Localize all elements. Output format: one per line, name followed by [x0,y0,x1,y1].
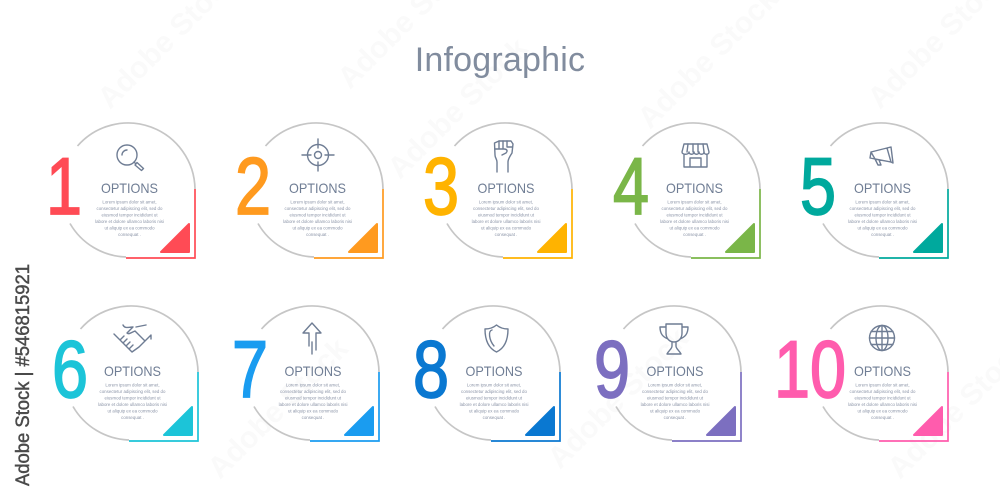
heading: OPTIONS [666,181,723,196]
description [279,382,347,420]
heading: OPTIONS [104,364,161,379]
card 4 [613,123,760,258]
description: eiusmod tempor incididunt ut [289,212,346,218]
description: consectetur adipiscing elit, sed do [642,389,709,394]
card 8 [413,306,560,441]
heading: OPTIONS [646,364,704,379]
description: consequat . [871,232,894,237]
description: consequat . [664,415,686,420]
description: ut aliquip ex ea commodo [857,226,908,230]
description: eiusmod tempor incididunt ut [854,212,911,218]
description: eiusmod tempor incididunt ut [647,396,704,400]
card 2 [235,123,383,258]
description: ut aliquip ex ea commodo [469,408,520,414]
heading: OPTIONS [466,364,522,379]
heading: OPTIONS [854,181,911,196]
heading: OPTIONS [289,181,346,196]
description: consectetur adipiscing elit, sed do [850,389,916,394]
icon: magnifier [117,145,144,170]
description: labore et dolore ullamco laboris nisi [279,402,347,407]
description: Lorem ipsum dolor sit amet, [105,382,160,388]
description: Lorem ipsum dolor sit amet, [102,200,157,204]
description: consequat . [121,415,144,420]
description: ut aliquip ex ea commodo [107,408,158,414]
description: Lorem ipsum dolor sit amet, [479,200,533,204]
description: labore et dolore ullamco laboris nisi [848,219,917,224]
description: ut aliquip ex ea commodo [669,226,720,230]
description [641,382,709,420]
description [660,200,729,237]
description: labore et dolore ullamco laboris nisi [848,402,917,407]
number: 6 [52,324,88,415]
card 7 [232,306,379,441]
description: Lorem ipsum dolor sit amet, [467,382,521,388]
description: consequat . [118,232,141,237]
heading: OPTIONS [284,364,342,379]
description: Lorem ipsum dolor sit amet, [667,200,722,204]
icon: megaphone [870,147,893,165]
description: consequat . [871,415,894,420]
description: eiusmod tempor incididunt ut [285,396,342,400]
icon: handshake [114,325,151,352]
description: consequat . [683,232,706,237]
description: consectetur adipiscing elit, sed do [473,206,540,211]
description: Lorem ipsum dolor sit amet, [855,382,910,388]
description [283,200,352,237]
description: labore et dolore ullamco laboris nisi [660,219,729,224]
number: 1 [46,141,82,232]
description: consequat . [495,232,517,237]
heading: OPTIONS [101,181,158,196]
title: Infographic [415,41,585,79]
icon: trophy [660,324,688,354]
description [460,382,528,420]
description: labore et dolore ullamco laboris nisi [95,219,164,224]
description: consequat . [302,415,324,420]
description: labore et dolore ullamco laboris nisi [641,402,709,407]
background watermark: Adobe Stock [382,32,535,185]
description: eiusmod tempor incididunt ut [666,212,723,218]
description: labore et dolore ullamco laboris nisi [472,219,540,224]
description: eiusmod tempor incididunt ut [478,212,535,218]
description [98,382,167,420]
description: Lorem ipsum dolor sit amet, [286,382,340,388]
description [472,200,540,237]
description: consectetur adipiscing elit, sed do [100,389,166,394]
description: ut aliquip ex ea commodo [292,226,343,230]
description: Lorem ipsum dolor sit amet, [648,382,702,388]
description: eiusmod tempor incididunt ut [101,212,158,218]
description: labore et dolore ullamco laboris nisi [460,402,528,407]
description: labore et dolore ullamco laboris nisi [98,402,167,407]
icon: target [302,139,334,171]
description [95,200,164,237]
number: 9 [594,324,630,415]
number: 2 [235,141,271,232]
stock credit: Adobe Stock | #546815921 [13,264,34,486]
heading: OPTIONS [854,364,911,379]
description: Lorem ipsum dolor sit amet, [855,200,910,204]
number: 3 [423,141,459,232]
number: 8 [413,324,449,415]
description: Lorem ipsum dolor sit amet, [290,200,345,204]
description: consectetur adipiscing elit, sed do [97,206,163,211]
description: consectetur adipiscing elit, sed do [285,206,351,211]
description: consectetur adipiscing elit, sed do [461,389,528,394]
description: ut aliquip ex ea commodo [481,226,532,230]
number: 4 [613,141,649,232]
icon: shield [485,325,508,352]
icon: arrow up [303,323,321,354]
card 9 [594,306,741,441]
description: ut aliquip ex ea commodo [857,408,908,414]
description: eiusmod tempor incididunt ut [466,396,523,400]
number: 7 [232,324,268,415]
card 5 [800,123,948,258]
heading: OPTIONS [478,181,534,196]
description [848,200,917,237]
number: 5 [800,141,836,232]
description: ut aliquip ex ea commodo [104,226,155,230]
background watermark: Adobe Stock [542,322,695,475]
card 10 [774,306,948,441]
card 1 [46,123,195,258]
number: 10 [774,324,846,415]
description: eiusmod tempor incididunt ut [104,396,161,400]
icon: store [682,144,709,167]
card 6 [52,306,198,441]
description: consequat . [483,415,505,420]
background watermark: Adobe Stock [202,332,355,485]
icon: fist [494,141,513,172]
icon: globe [870,326,894,350]
description: consectetur adipiscing elit, sed do [662,206,728,211]
description: labore et dolore ullamco laboris nisi [283,219,352,224]
description: consectetur adipiscing elit, sed do [850,206,916,211]
description [848,382,917,420]
description: ut aliquip ex ea commodo [288,408,339,414]
description: consectetur adipiscing elit, sed do [280,389,347,394]
description: eiusmod tempor incididunt ut [854,396,911,400]
description: ut aliquip ex ea commodo [650,408,701,414]
card 3 [423,123,572,258]
description: consequat . [306,232,329,237]
